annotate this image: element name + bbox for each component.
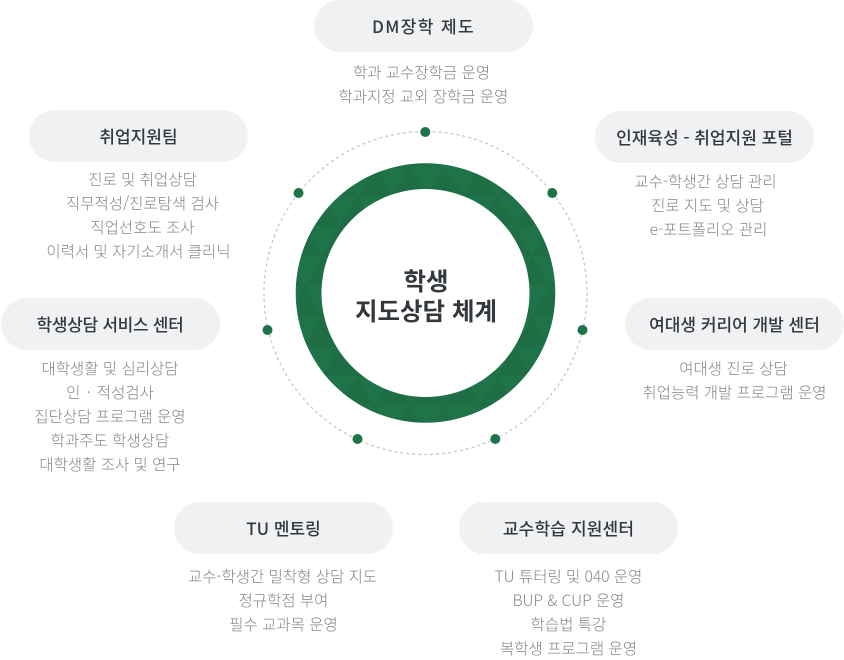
heading: 교수학습 지원센터 [503,515,634,540]
text list: 취업능력 개발 프로그램 운영 [642,381,827,403]
heading [595,111,814,163]
text list: 학과 교수장학금 운영 [353,61,490,83]
orbit dashed circle [264,132,587,454]
heading: TU 멘토링 [246,515,321,540]
text list: 직업선호도 조사 [90,216,195,238]
heading [314,0,533,52]
panel: talent portal [595,111,814,240]
text list: 복학생 프로그램 운영 [500,637,637,659]
center title [355,262,497,328]
text list: 대학생활 및 심리상담 [41,357,179,379]
text list: 교수-학생간 밀착형 상담 지도 [188,565,377,587]
heading: 인재육성 - 취업지원 포털 [616,124,793,149]
heading: 취업지원팀 [99,123,178,148]
heading [625,298,844,350]
heading [459,502,678,554]
text list: 대학생활 조사 및 연구 [39,453,181,475]
text list: 학과주도 학생상담 [51,429,169,451]
heading: DM장학 제도 [372,13,475,38]
text list [642,357,827,403]
text list: 필수 교과목 운영 [229,613,338,635]
center title: 학생 [403,262,449,298]
panel: women's career center [625,298,844,403]
center title: 지도상담 체계 [355,292,497,328]
orbit dots [262,127,588,444]
text list: 학과지정 교외 장학금 운영 [339,85,508,107]
text list: 이력서 및 자기소개서 클리닉 [46,240,231,262]
text list: 여대생 진로 상담 [679,357,788,379]
text list [34,357,186,475]
panel: DM scholarship [314,0,533,107]
panel: teaching and learning center [459,502,678,659]
panel: student counseling center [1,298,220,475]
text list: BUP & CUP 운영 [513,589,624,611]
green ring [296,163,555,423]
heading [174,502,393,554]
text list: 인 · 적성검사 [66,381,154,403]
text list: 집단상담 프로그램 운영 [34,405,186,427]
panel: TU mentoring [174,502,393,635]
text list: 학습법 특강 [531,613,606,635]
heading [0,298,220,350]
panel: employment support team [29,110,248,262]
heading: 학생상담 서비스 센터 [36,311,183,336]
text list [46,168,231,262]
text list: e-포트폴리오 관리 [650,218,767,240]
text list [339,61,508,107]
text list [634,170,777,240]
text list: 정규학점 부여 [239,589,328,611]
heading: 여대생 커리어 개발 센터 [649,311,820,336]
text list: 진로 지도 및 상담 [651,194,764,216]
text list: TU 튜터링 및 040 운영 [495,565,642,587]
text list: 교수-학생간 상담 관리 [634,170,777,192]
text list: 직무적성/진로탐색 검사 [66,192,219,214]
heading [29,110,248,162]
text list [188,565,377,635]
text list [495,565,642,659]
text list: 진로 및 취업상담 [88,168,197,190]
